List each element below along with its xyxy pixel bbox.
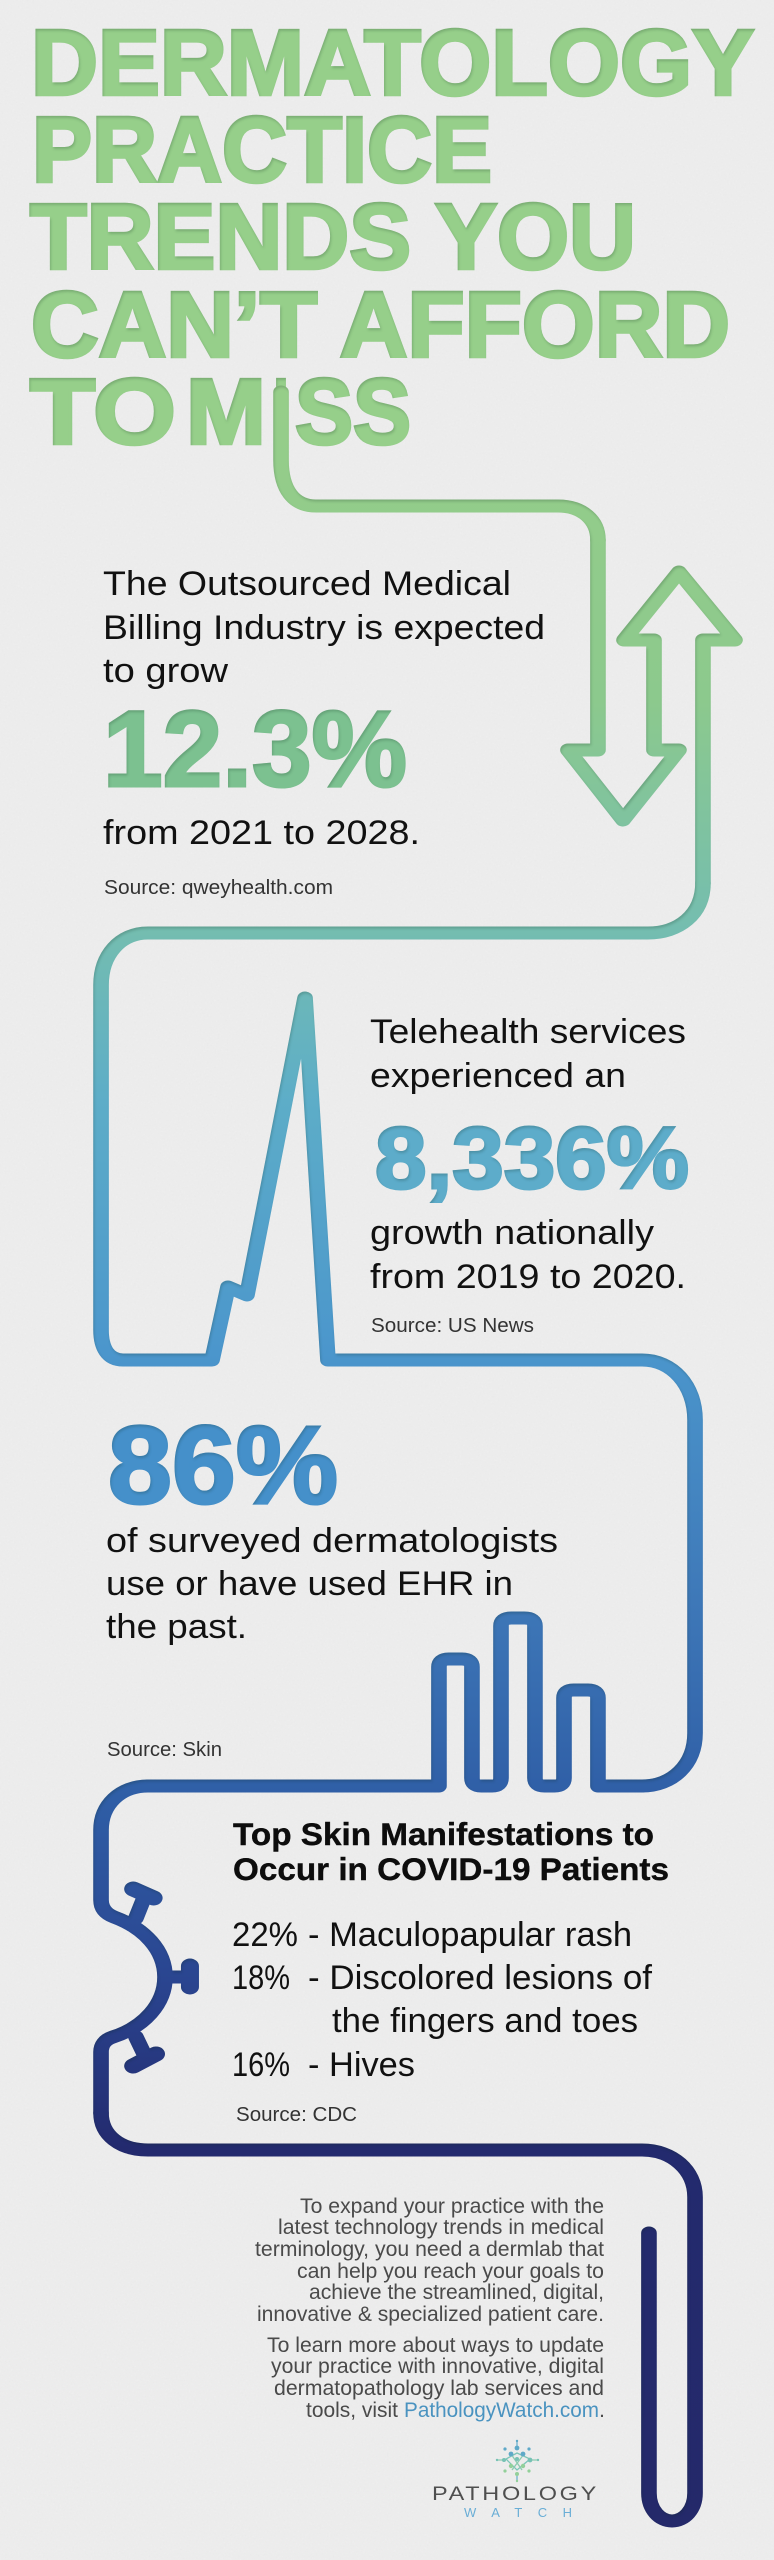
title [30, 10, 754, 464]
heading: Top Skin Manifestations to [233, 1816, 654, 1852]
title: CAN’T AFFORD [31, 272, 730, 376]
text: billing intro: to grow [103, 652, 228, 690]
wordmark: PATHOLOGY [432, 2484, 599, 2505]
text: expand your practice: terminology, you need a dermlab that [255, 2237, 604, 2261]
title: DERMATOLOGY [31, 10, 754, 114]
icon: virus spike caps [133, 1889, 190, 2066]
text: date range: from 2021 to 2028. [103, 814, 420, 852]
list item: 18%: - Discolored lesions of [308, 1959, 652, 1997]
pipe: closing loop [101, 2113, 695, 2521]
list item: 18% [232, 1959, 652, 2040]
title: TO [30, 360, 176, 464]
text: billing intro [103, 565, 545, 690]
stat: 8,336%: 8,336% [375, 1110, 689, 1207]
gradient pipeline connecting all sections [101, 392, 735, 2521]
text: learn more: dermatopathology lab services and [274, 2376, 604, 2400]
text: expand your practice: latest technology trends in medical [278, 2215, 604, 2239]
text: learn more [267, 2333, 605, 2422]
list item: 16%: - Hives [308, 2046, 415, 2084]
text: learn more: PathologyWatch.com [404, 2398, 599, 2422]
panel: EHR usage [106, 1404, 558, 1761]
text: learn more: . [599, 2398, 605, 2422]
text: telehealth growth: growth nationally [370, 1214, 655, 1252]
title: TRENDS YOU [30, 184, 636, 288]
heading [233, 1816, 669, 1887]
heading: Occur in COVID-19 Patients [233, 1851, 669, 1887]
text: expand your practice: To expand your practice with the [300, 2194, 604, 2218]
icon: up and down arrows [568, 540, 735, 883]
text: learn more: To learn more about ways to update [267, 2333, 604, 2357]
list item: 18%: the fingers and toes [332, 2002, 638, 2040]
logo: Pathology Watch [432, 2440, 599, 2520]
text: telehealth intro: experienced an [370, 1057, 626, 1095]
wordmark [432, 2484, 599, 2520]
text: EHR description: of surveyed dermatologists [106, 1522, 558, 1560]
panel: closing message [255, 2194, 605, 2422]
pipe: from title to first section [281, 392, 598, 540]
text: EHR description: the past. [106, 1608, 247, 1646]
text: telehealth intro [370, 1013, 686, 1095]
text: expand your practice: innovative & specialized patient care. [257, 2302, 604, 2326]
text: expand your practice: can help you reach your goals to [297, 2259, 604, 2283]
source: Source: CDC [236, 2103, 357, 2126]
source: Source: qweyhealth.com [104, 876, 333, 899]
stat: 12.3%: 12.3% [103, 688, 407, 809]
list item: 22%: 22% [232, 1916, 298, 1954]
list item: 16%: 16% [232, 2046, 290, 2084]
title: SS [295, 360, 411, 464]
wordmark: WATCH [464, 2505, 572, 2520]
title: I [274, 360, 288, 464]
text: billing intro: The Outsourced Medical [103, 565, 511, 603]
panel: COVID-19 skin manifestations [232, 1816, 669, 2126]
source: Source: US News [371, 1314, 534, 1337]
text: telehealth growth [370, 1214, 686, 1296]
stat: 86%: 86% [108, 1404, 338, 1527]
text: expand your practice: achieve the streamlined, digital, [309, 2280, 604, 2304]
title: PRACTICE [32, 98, 492, 202]
list item: 22%: - Maculopapular rash [308, 1916, 632, 1954]
text: billing intro: Billing Industry is expected [103, 609, 545, 647]
list item: 18%: 18% [232, 1959, 290, 1997]
icon: bar chart line [148, 1618, 642, 1786]
panel: outsourced medical billing [103, 565, 545, 899]
text: telehealth growth: from 2019 to 2020. [370, 1258, 686, 1296]
text: EHR description: use or have used EHR in [106, 1565, 513, 1603]
icon: virus outline [101, 1786, 190, 2113]
text: telehealth intro: Telehealth services [370, 1013, 686, 1051]
text: EHR description [106, 1522, 558, 1646]
text: learn more: tools, visit [306, 2398, 398, 2422]
panel: telehealth [370, 1013, 689, 1337]
list item: 16% [232, 2046, 415, 2084]
icon: telehealth spike line [101, 883, 703, 1786]
title: M [186, 360, 266, 464]
source: Source: Skin [107, 1738, 222, 1761]
icon: logo molecule [496, 2440, 539, 2482]
text: learn more: your practice with innovative, digital [271, 2354, 604, 2378]
text: expand your practice [255, 2194, 604, 2326]
